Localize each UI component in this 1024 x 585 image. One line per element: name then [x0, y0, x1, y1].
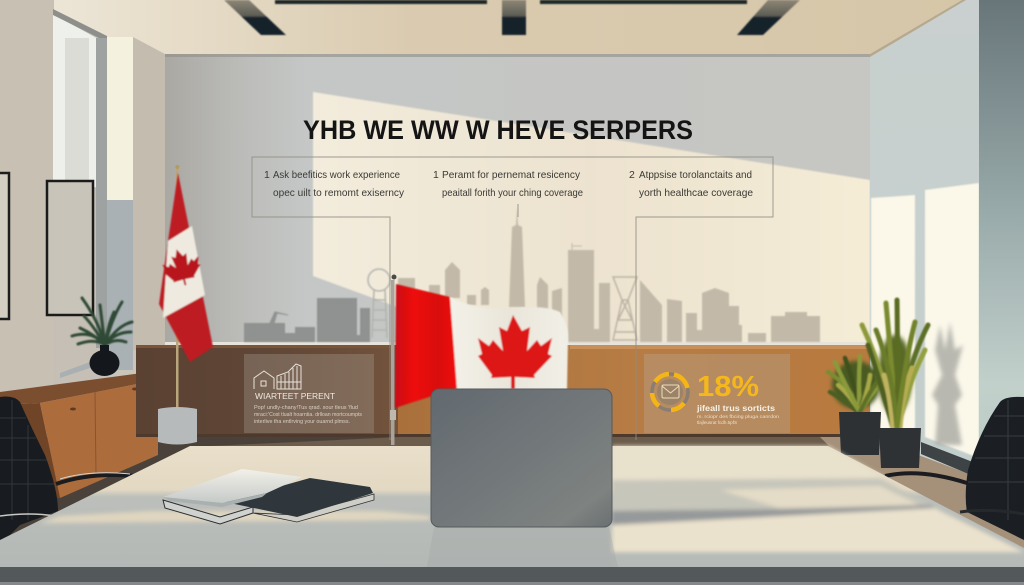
- flag pole and base: [158, 165, 197, 444]
- desk front edge: [0, 567, 1024, 585]
- text block: column one: opec uilt to remomt exiserncy: [273, 187, 405, 199]
- tall plant: [862, 300, 928, 468]
- left office chair: [0, 397, 135, 545]
- title: YHB WE WW W HEVE SERPERS: [303, 115, 693, 145]
- text block: column two: 1: [433, 169, 439, 181]
- skyline silhouette: [244, 207, 820, 342]
- small plant: [828, 356, 885, 455]
- text block: column two: Peramt for pernemat resicency: [442, 169, 581, 181]
- text block: column three: Atppsise torolanctaits and: [639, 169, 752, 181]
- skyline: lattice tower right: [613, 277, 637, 340]
- flag cloth: [159, 173, 213, 362]
- desk: [0, 446, 1024, 585]
- left wall and window: [0, 0, 165, 400]
- plant shadow: [932, 322, 963, 445]
- text block: column one: 1: [264, 169, 270, 181]
- card body text: Pop! undly-chany!Tus qrad. sour tleus 'flud: [254, 405, 358, 411]
- stat heading: jifeall trus sorticts: [696, 403, 775, 413]
- right office chair: [885, 397, 1024, 540]
- stat body text: m. rciopr des fbcing pluga canrdon: [697, 414, 779, 420]
- card body text: [254, 405, 363, 425]
- wood wainscot: [136, 345, 870, 437]
- panel: right glass card: [644, 354, 790, 433]
- laptop: [427, 389, 618, 567]
- text block: column one: [264, 169, 405, 199]
- stat body text: tlajleusrat fcdh.5pfS: [697, 420, 737, 426]
- credenza with plant: [0, 298, 158, 500]
- desk light streaks: [40, 446, 1024, 567]
- text block: column three: yorth healthcae coverage: [639, 187, 753, 199]
- stat body text: [697, 414, 779, 426]
- text block: column two: [433, 169, 583, 199]
- back wall: [165, 54, 870, 346]
- skyline: lattice tower left: [368, 269, 390, 338]
- card heading: WIARTEET PERENT: [255, 391, 335, 401]
- skyline: shaded part: [244, 298, 370, 342]
- text block: column one: Ask beefitics work experience: [273, 169, 400, 181]
- icon: house and building: [254, 364, 301, 389]
- right potted plants: [828, 300, 928, 468]
- card body text: interlive tha entlrving your ouarnd plmss.: [254, 419, 350, 425]
- text block: column three: [629, 169, 753, 199]
- flag pole: [390, 274, 396, 445]
- icon: ring with envelope: [652, 374, 688, 410]
- connector frame lines: [252, 157, 773, 440]
- skyline: sunlit part: [398, 207, 820, 342]
- floor: [0, 437, 1024, 560]
- panel: left glass card: [244, 354, 374, 433]
- large flag: [390, 274, 568, 445]
- flag cloth: [395, 284, 568, 408]
- ceiling: [0, 0, 1024, 60]
- right wall with sun patches: [870, 0, 980, 478]
- text block: column three: 2: [629, 169, 635, 181]
- icon: potted plant: [72, 298, 132, 376]
- card body text: mraci:'Cost tlualt hoarntia. drlloan mortcoumpts: [254, 412, 363, 418]
- far right column: [979, 0, 1024, 480]
- text block: column two: peaitall forith your ching coverage: [442, 187, 583, 199]
- ceiling lights: [224, 0, 800, 35]
- small flag on stand: [158, 165, 213, 444]
- wall picture frames: [0, 173, 93, 319]
- stat number: 18%: [697, 371, 759, 403]
- notebooks and paper: [163, 469, 374, 524]
